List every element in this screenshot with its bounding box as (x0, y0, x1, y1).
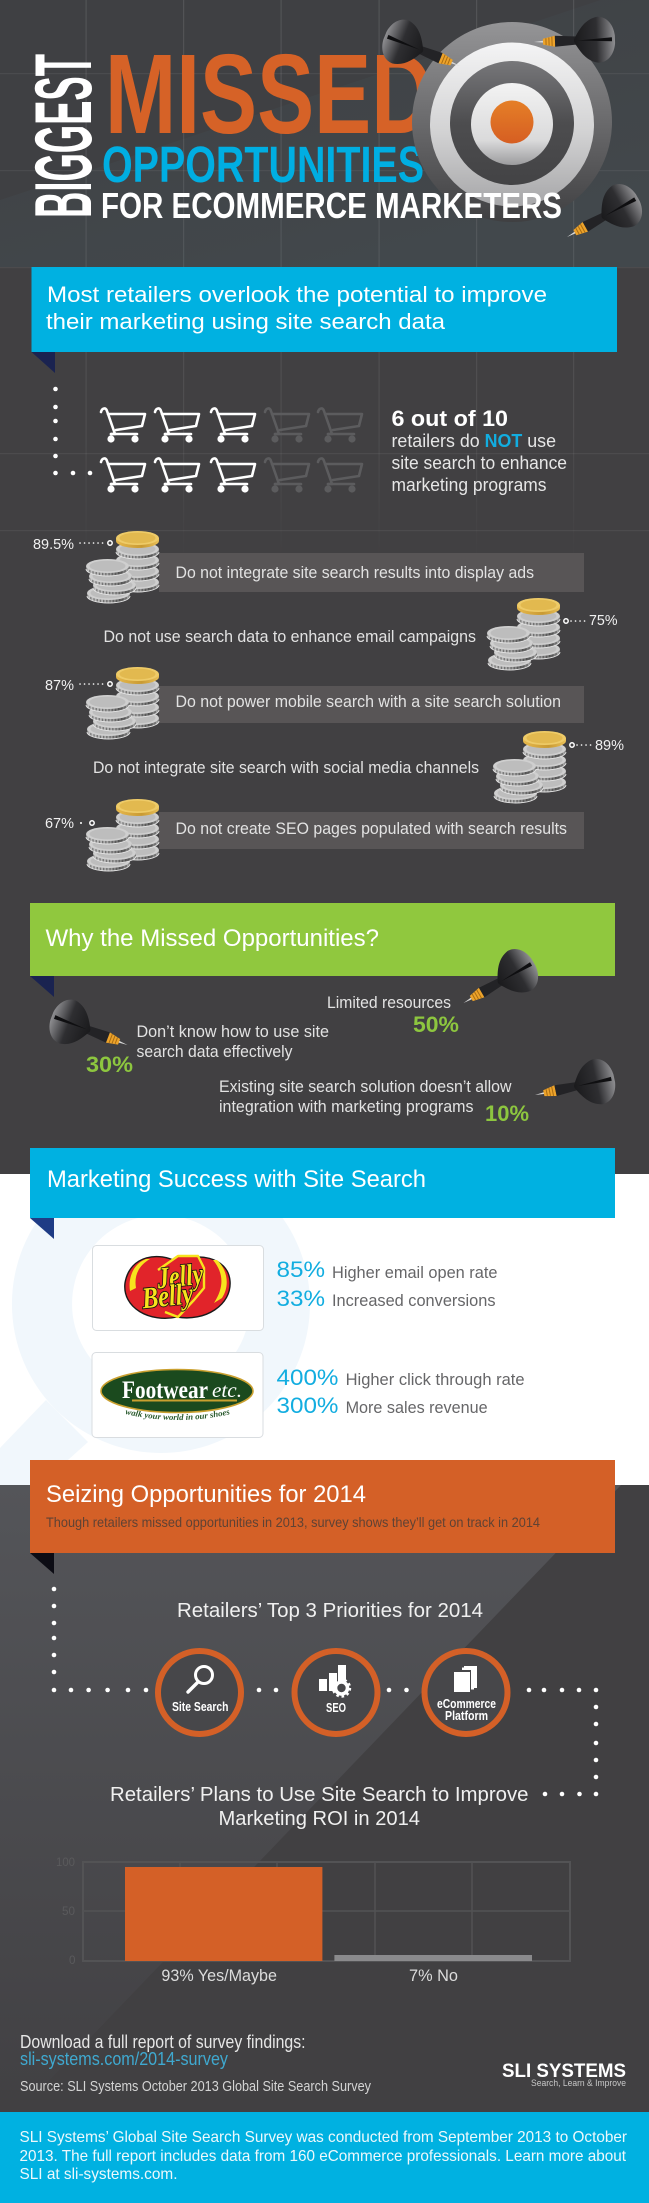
row: social media 89%: 89% (595, 737, 624, 754)
row: mobile search 87% (45, 667, 584, 739)
title: MISSED (105, 31, 433, 157)
row: SEO pages 67%: Do not create SEO pages populated with search results (176, 819, 567, 838)
icon: dart lower right (556, 178, 649, 257)
stat: 6 out of 10: retailers do NOT use (392, 431, 556, 451)
callout: limited resources 50%: 50% (413, 1012, 459, 1037)
bar chart: 93% yes/maybe vs 7% no: 7% No (409, 1966, 458, 1985)
title: OPPORTUNITIES (102, 136, 424, 193)
callout: limited resources 50% (327, 943, 545, 1037)
banner: why the missed opportunities: Why the Missed Opportunities? (46, 925, 379, 952)
stats: Footwear etc: 300% (276, 1393, 338, 1418)
banner: seizing opportunities: Though retailers missed opportunities in 2013, survey shows they’ll get on track in 2014 (46, 1514, 540, 1530)
bar chart: 93% yes/maybe vs 7% no: 100 (56, 1855, 75, 1869)
stats: Jelly Belly: 33% (276, 1286, 325, 1311)
priority: ecommerce platform: Platform (445, 1709, 488, 1723)
heading: plans to use site search (110, 1783, 528, 1830)
callout: existing solution 10%: Existing site search solution doesn’t allow (219, 1077, 512, 1096)
heading: top 3 priorities: Retailers’ Top 3 Priorities for 2014 (177, 1599, 483, 1622)
row: email campaigns 75%: Do not use search data to enhance email campaigns (104, 627, 476, 646)
row: email campaigns 75% (104, 598, 618, 670)
dotted connector through priorities (52, 1587, 598, 1796)
row: mobile search 87%: Do not power mobile search with a site search solution (176, 692, 561, 711)
banner: marketing success: Marketing Success with Site Search (47, 1166, 426, 1193)
icon: dart top right (533, 16, 616, 65)
callout: existing solution 10% (219, 1056, 619, 1126)
banner: most retailers overlook: Most retailers overlook the potential to improve (47, 282, 547, 307)
dotted connector to carts (53, 387, 92, 475)
download link and source: Download a full report of survey findings: (20, 2031, 306, 2052)
stat: 6 out of 10: marketing programs (392, 475, 546, 495)
stats: Jelly Belly: Increased conversions (332, 1291, 496, 1310)
row: SEO pages 67% (45, 799, 584, 871)
callout: don't know how 30%: search data effectively (136, 1042, 293, 1061)
footer panel: SLI Systems’ Global Site Search Survey was conducted from September 2013 to October (20, 2129, 628, 2146)
stat: 6 out of 10: site search to enhance (392, 453, 567, 473)
stats: Jelly Belly: Higher email open rate (332, 1263, 498, 1282)
callout: existing solution 10%: integration with marketing programs (219, 1097, 474, 1116)
priority: SEO (294, 1651, 378, 1734)
row: display ads 89.5%: 89.5% (33, 536, 74, 553)
banner: why the missed opportunities (30, 903, 615, 997)
logo: SLI Systems: SLI SYSTEMS (502, 2061, 626, 2082)
callout: limited resources 50%: Limited resources (327, 993, 451, 1012)
priority: ecommerce platform: eCommerce (437, 1697, 496, 1711)
logo card: Footwear etc: walk your world in our shoes (126, 1410, 230, 1420)
lower dark background (0, 1485, 649, 2203)
heading: plans to use site search: Marketing ROI in 2014 (218, 1807, 420, 1830)
stats: Footwear etc: More sales revenue (346, 1398, 488, 1417)
stats: Jelly Belly: 85% (276, 1257, 325, 1282)
stats: Footwear etc: 400% (276, 1365, 338, 1390)
white middle background with pale magnifier watermark (0, 1155, 649, 1486)
download link and source (20, 2031, 372, 2095)
priority: site search (158, 1651, 241, 1734)
callout: don't know how 30%: Don’t know how to use site (136, 1022, 329, 1041)
bar chart: 93% yes/maybe vs 7% no: 93% Yes/Maybe (161, 1966, 277, 1985)
download link and source: sli-systems.com/2014-survey (20, 2048, 229, 2069)
logo card: Footwear etc (92, 1352, 264, 1438)
icon: dart top left (376, 14, 469, 87)
top dark background (0, 0, 649, 1175)
row: display ads 89.5%: Do not integrate site search results into display ads (176, 563, 534, 582)
stats: Jelly Belly (276, 1257, 498, 1311)
heading: plans to use site search: Retailers’ Plans to Use Site Search to Improve (110, 1783, 528, 1806)
logo card: Footwear etc: etc. (212, 1380, 242, 1402)
banner: seizing opportunities (30, 1460, 615, 1574)
logo card: Jelly Belly: Belly (140, 1277, 195, 1315)
row: social media 89% (93, 731, 624, 803)
banner: most retailers overlook (32, 267, 617, 373)
row: social media 89%: Do not integrate site search with social media channels (93, 758, 479, 777)
callout: don't know how 30% (44, 994, 329, 1077)
row: mobile search 87%: 87% (45, 677, 74, 694)
title (19, 31, 433, 218)
footer panel (0, 2112, 649, 2203)
footer panel: 2013. The full report includes data from 160 eCommerce professionals. Learn more about (20, 2148, 627, 2165)
stat: 6 out of 10: 6 out of 10 (392, 406, 508, 431)
logo: SLI Systems: Search, Learn & Improve (531, 2078, 626, 2089)
banner: most retailers overlook: their marketing using site search data (46, 309, 446, 334)
banner: marketing success (30, 1148, 615, 1239)
callout: existing solution 10%: 10% (485, 1101, 529, 1126)
priority: ecommerce platform (424, 1651, 508, 1734)
logo card: Jelly Belly: Jelly (155, 1258, 205, 1295)
banner: seizing opportunities: Seizing Opportunities for 2014 (46, 1481, 366, 1508)
logo card: Footwear etc: Footwear (122, 1377, 208, 1404)
carts: 6 of 10 highlighted (101, 408, 362, 491)
footer panel: SLI at sli-systems.com. (20, 2166, 178, 2183)
stat: 6 out of 10 (392, 406, 567, 495)
bar chart: 93% yes/maybe vs 7% no (56, 1855, 570, 1985)
bar chart: 93% yes/maybe vs 7% no: 0 (69, 1953, 76, 1967)
stats: Footwear etc: Higher click through rate (346, 1370, 525, 1389)
bar chart: 93% yes/maybe vs 7% no: 50 (62, 1904, 75, 1918)
priority: SEO: SEO (326, 1701, 346, 1715)
stats: Footwear etc (276, 1365, 525, 1418)
download link and source: Source: SLI Systems October 2013 Global Site Search Survey (20, 2079, 372, 2095)
priority: site search: Site Search (172, 1700, 228, 1714)
callout: don't know how 30%: 30% (86, 1052, 133, 1077)
title line: for ecommerce marketers: FOR ECOMMERCE MARKETERS (101, 185, 562, 226)
icon: dartboard target (412, 22, 612, 222)
row: SEO pages 67%: 67% (45, 815, 74, 832)
row: display ads 89.5% (33, 531, 584, 603)
logo card: Jelly Belly (92, 1246, 264, 1330)
row: email campaigns 75%: 75% (589, 612, 618, 629)
